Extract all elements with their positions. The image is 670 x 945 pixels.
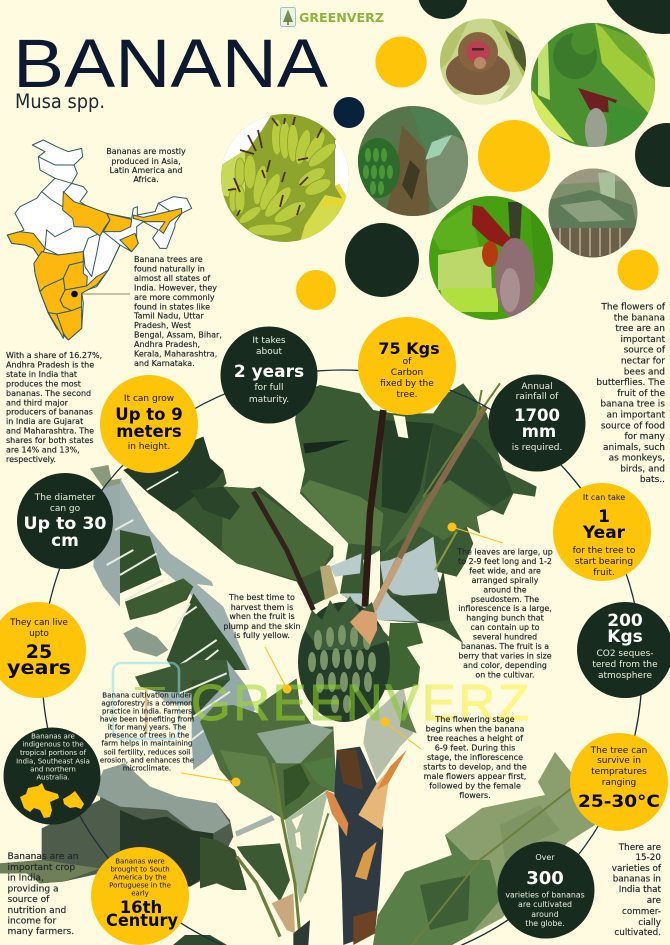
circle: height: It can grow — [124, 394, 174, 404]
circle: rainfall: is required. — [512, 443, 562, 453]
circle: bearing fruit — [553, 483, 651, 581]
text: flowers: bats.. — [640, 475, 665, 485]
text: share of production — [6, 351, 102, 464]
icon: Asia and Australia map — [20, 783, 84, 818]
photo circle: bunch on tree — [356, 106, 474, 216]
text: natural occurrence: found naturally in — [134, 264, 205, 274]
upper left dark leaf — [123, 437, 338, 610]
circle: bearing fruit: Year — [582, 523, 626, 543]
circle: carbon: tree. — [397, 390, 417, 400]
circle: varieties global — [498, 842, 594, 938]
text: commercial varieties: bananas in — [613, 874, 661, 884]
text: production regions — [106, 147, 186, 184]
text: harvest time: when the fruit is — [229, 612, 295, 621]
text: share of production: respectively. — [6, 455, 56, 464]
upper fragment of left leaf — [135, 660, 255, 770]
watermark — [113, 663, 529, 739]
pointer: flowering — [380, 718, 421, 749]
text: important crop: Bananas are an — [8, 852, 79, 862]
text: leaves and inflorescence: on the cultivar. — [475, 670, 535, 679]
text: agroforestry: erosion, and enhances the — [100, 756, 194, 764]
text: commercial varieties: There are — [618, 843, 661, 853]
text: commercial varieties: 15-20 — [635, 853, 661, 863]
circle: indigenous range: Bananas are — [31, 732, 75, 740]
circle: indigenous range — [4, 728, 100, 824]
circle: indigenous range: India, Southeast Asia — [16, 758, 90, 766]
text: agroforestry: soil fertility, reduces soil — [104, 748, 190, 756]
text: natural occurrence: India. However, they — [134, 283, 217, 292]
text: flowers — [596, 302, 666, 485]
circle: sequestration: 200 — [607, 611, 643, 631]
text: leaves and inflorescence: arranged spirally — [472, 576, 539, 585]
text: agroforestry: presence of trees in the — [105, 730, 189, 740]
circle: height: meters — [116, 422, 182, 441]
text: agroforestry: have been benefiting from — [100, 714, 194, 724]
text: agroforestry: microclimate. — [123, 764, 171, 772]
photo circle: monkey — [440, 18, 527, 106]
circle: sequestration: tered from the — [592, 660, 658, 670]
text: leaves and inflorescence: around the — [483, 585, 527, 594]
text: flowering stage: followed by the female — [429, 782, 521, 790]
bottom left grey leaf — [0, 763, 233, 887]
watermark: GREENVERZ — [191, 674, 529, 731]
circle: carbon — [358, 317, 456, 415]
circle: 16th century: Bananas were — [115, 858, 165, 866]
text: agroforestry: farm helps in maintaining — [101, 738, 193, 748]
text: flowers: the banana — [614, 313, 665, 323]
text: commercial varieties: cultivated. — [614, 928, 661, 938]
text: flowers: animals, such — [603, 443, 665, 453]
bottom right leaf — [373, 752, 595, 945]
text: natural occurrence: Andhra Pradesh, — [134, 340, 200, 349]
text: flowers: source of — [624, 346, 666, 356]
text: share of production: in India are Gujarat — [6, 417, 83, 426]
logo: GREENVERZ — [299, 11, 384, 25]
photo circle: banana flower — [429, 196, 553, 320]
circle: height: in height. — [128, 442, 170, 452]
circle: sequestration — [577, 602, 670, 698]
text: harvest time: is fully yellow. — [234, 631, 290, 640]
text: agroforestry: Banana cultivation under — [102, 690, 192, 700]
circle: bearing fruit: for the tree to — [573, 546, 636, 556]
text: important crop: providing a — [8, 884, 59, 894]
circle: indigenous range: indigenous to the — [22, 740, 84, 748]
brown rib centre — [373, 407, 485, 610]
photo circle: banana field — [548, 168, 638, 258]
text: agroforestry: practice in India. Farmers — [102, 706, 192, 716]
text: flowering stage: flowers. — [459, 791, 491, 800]
text: flowers: for many — [624, 432, 666, 442]
circle: height — [100, 375, 198, 473]
circle: sequestration: atmosphere — [598, 671, 652, 681]
circle: varieties global: varieties of bananas — [505, 890, 585, 900]
text: flowering stage: stage, the inflorescence — [427, 753, 523, 762]
text: share of production: Andhra Pradesh is the — [6, 360, 94, 370]
circle: carbon: of — [403, 357, 412, 367]
circle: lifespan — [0, 602, 86, 698]
text: leaves and inflorescence: berry that varies in size — [458, 652, 552, 660]
text: agroforestry: agroforestry is a common — [101, 698, 193, 708]
text: leaves and inflorescence: can contain up to — [471, 623, 540, 632]
circle: bearing fruit: fruit. — [593, 568, 615, 578]
text: commercial varieties — [612, 843, 662, 938]
text: flowering stage: tree reaches a height of — [427, 734, 523, 743]
text: production regions: produced in Asia, — [111, 157, 181, 166]
text: important crop: many farmers. — [8, 927, 74, 937]
text: leaves and inflorescence: feet wide, and are — [469, 566, 541, 575]
text: flowers: The flowers of — [600, 302, 666, 312]
circle: carbon: fixed by the — [380, 379, 434, 389]
circle: temperature: The tree can — [590, 746, 647, 756]
text: leaves and inflorescence: to 2-9 feet long and 1-2 — [458, 557, 552, 566]
top centre large leaf — [295, 383, 537, 643]
circle: diameter — [17, 473, 113, 569]
text: share of production: and third major — [6, 398, 69, 407]
text: natural occurrence: found in states like — [134, 302, 210, 311]
text: natural occurrence: are more commonly — [134, 293, 215, 302]
circle: maturity — [220, 326, 318, 424]
dark and yellow decorative circles — [296, 0, 670, 310]
text: production regions: Latin America and — [110, 166, 182, 175]
banana bunch — [298, 596, 392, 722]
circle: height: Up to 9 — [115, 405, 183, 424]
text: natural occurrence: Tamil Nadu, Uttar — [133, 312, 204, 321]
text: commercial varieties: are — [647, 896, 661, 906]
text: harvest time — [223, 593, 301, 640]
circle: rainfall: Annual — [521, 382, 553, 392]
text: share of production: shares for both states — [6, 436, 94, 445]
text: commercial varieties: commer- — [622, 907, 661, 917]
left pale leaf — [90, 465, 250, 670]
dark rib centre — [365, 383, 500, 610]
subtitle: Musa spp. — [15, 90, 105, 113]
circle: maturity: about — [256, 347, 282, 357]
text: flowering stage: 6-9 feet. During this — [435, 744, 515, 752]
circle: temperature: tempratures — [591, 767, 647, 777]
circle: lifespan: 25 — [26, 641, 52, 663]
right blob leaf beside bunch — [385, 623, 423, 690]
text: production regions: Bananas are mostly — [106, 147, 186, 156]
circle: bearing fruit: It can take — [583, 493, 625, 502]
text: share of production: produces the most — [6, 379, 81, 388]
text: flowers: butterflies. The — [596, 378, 665, 388]
text: share of production: are 14% and 13%, — [6, 446, 80, 454]
text: commercial varieties: cially — [638, 918, 661, 928]
text: flowers: nectar for — [621, 356, 665, 366]
circle: 16th century: 16th — [120, 898, 162, 917]
circle: diameter: The diameter — [34, 493, 95, 503]
pointer: leaves — [448, 522, 503, 543]
pointer: harvest — [265, 647, 292, 694]
text: harvest time: The best time to — [228, 593, 295, 602]
circle: rainfall: mm — [522, 422, 556, 441]
circle: lifespan: They can live — [9, 618, 68, 628]
circle: temperature: 25-30°C — [578, 792, 660, 812]
text: commercial varieties: varieties of — [612, 864, 662, 874]
text: flowers: an important — [606, 410, 665, 420]
text: natural occurrence: Pradesh, West — [134, 321, 191, 330]
circle: varieties global: 300 — [526, 868, 564, 889]
text: natural occurrence: Kerala, Maharashtra, — [134, 350, 217, 358]
circle: varieties global: around — [531, 910, 559, 919]
lower middle leaf — [200, 678, 337, 945]
circle: varieties global: the globe. — [525, 919, 565, 928]
circle: 16th century: early — [131, 890, 149, 898]
circle: 16th century — [91, 847, 189, 945]
text: leaves and inflorescence — [456, 548, 553, 679]
text: share of production: With a share of 16.27%, — [6, 351, 102, 360]
text: flowers: fruit of the — [617, 389, 665, 399]
text: natural occurrence: and Karnataka. — [134, 359, 195, 368]
circle: temperature: survive in — [597, 756, 641, 766]
circle: maturity: for full — [254, 383, 284, 393]
circle: maturity: 2 years — [234, 362, 304, 382]
stalk base orange — [350, 610, 377, 645]
circle: lifespan: years — [7, 657, 71, 679]
banana plant illustration — [0, 383, 595, 945]
text: leaves and inflorescence: inflorescence is a large, — [458, 604, 552, 613]
circle: sequestration: Kgs — [607, 627, 643, 647]
text: flowers: tree are an — [615, 324, 665, 334]
circle: diameter: Up to 30 — [24, 514, 107, 534]
text: harvest time: harvest them is — [231, 603, 293, 612]
circle: indigenous range: tropical portions of — [20, 749, 87, 757]
circle: bearing fruit: 1 — [598, 507, 610, 527]
circle: sequestration: CO2 seques- — [596, 649, 654, 659]
trunk — [325, 687, 417, 945]
logo — [280, 8, 384, 26]
text: flowering stage — [423, 715, 527, 800]
text: flowering stage: male flowers appear first, — [424, 772, 526, 781]
text: important crop: important crop — [8, 863, 75, 873]
text: share of production: state in India that — [6, 370, 77, 379]
text: important crop: nutrition and — [8, 906, 66, 916]
circle: 16th century: Portuguese in the — [109, 882, 171, 890]
connector ring — [42, 370, 642, 945]
title: BANANA — [13, 25, 328, 102]
text: flowers: as monkeys, — [609, 454, 665, 464]
text: natural occurrence — [133, 255, 222, 368]
text: leaves and inflorescence: several hundred — [473, 633, 537, 642]
text: flowers: banana tree is — [600, 400, 665, 410]
circle: indigenous range: and northern — [30, 766, 76, 774]
photo circle: bunch and flower in plant — [531, 23, 655, 152]
circle: rainfall — [488, 374, 586, 472]
circle: maturity: It takes — [252, 336, 286, 346]
text: leaves and inflorescence: and color, depending — [463, 661, 547, 670]
text: important crop: in India, — [8, 874, 44, 884]
circle: indigenous range: Australia. — [36, 774, 70, 782]
text: leaves and inflorescence: bananas. The fruit is a — [461, 642, 549, 651]
text: share of production: and Maharashtra. The — [6, 427, 94, 436]
circle: 16th century: America by the — [113, 874, 167, 882]
text: flowers: bees and — [624, 367, 665, 377]
India map — [7, 140, 192, 340]
map marker — [71, 291, 130, 297]
circle: rainfall: rainfall of — [516, 392, 559, 402]
circle: bearing fruit: start bearing — [575, 557, 633, 567]
text: natural occurrence: almost all states of — [134, 274, 210, 283]
circle: carbon: Carbon — [391, 368, 423, 378]
circle: temperature — [570, 733, 668, 831]
text: important crop — [8, 852, 79, 937]
text: natural occurrence: Bengal, Assam, Bihar, — [134, 331, 222, 340]
text: commercial varieties: India that — [619, 885, 662, 895]
circle: 16th century: brought to South — [110, 866, 170, 874]
text: leaves and inflorescence: hanging bunch that — [466, 614, 544, 623]
text: flowering stage: The flowering stage — [434, 715, 515, 724]
text: flowering stage: begins when the banana — [426, 724, 525, 734]
text: share of production: bananas. The second — [6, 389, 91, 398]
circle: temperature: ranging — [602, 778, 636, 788]
circle: diameter: can go — [50, 504, 81, 514]
text: agroforestry — [100, 690, 194, 772]
circle: varieties global: Over — [535, 853, 555, 862]
circle: 16th century: Century — [106, 911, 178, 930]
rib highlight — [423, 383, 500, 497]
small dark leaf at bottom — [173, 935, 227, 945]
text: flowering stage: starts to develop, and the — [423, 762, 527, 772]
text: agroforestry: it for many years. The — [108, 722, 186, 732]
text: flowers: important — [621, 335, 665, 345]
circle: varieties global: are cultivated — [518, 900, 572, 909]
text: natural occurrence: Banana trees are — [134, 255, 203, 264]
circle: rainfall: 1700 — [514, 406, 560, 425]
text: share of production: producers of bananas — [6, 408, 93, 417]
text: flowers: birds, and — [620, 464, 665, 474]
text: flowers: source of food — [601, 421, 665, 431]
text: leaves and inflorescence: pseudostem. The — [471, 595, 539, 604]
pointer: agroforestry — [181, 773, 240, 786]
text: harvest time: plump and the skin — [223, 622, 301, 631]
text: leaves and inflorescence: The leaves are large, up — [456, 548, 553, 556]
photo circle: banana bunch close-up — [221, 114, 349, 242]
text: production regions: Africa. — [133, 175, 159, 184]
circle: maturity: maturity. — [249, 395, 289, 405]
circle: lifespan: upto — [29, 629, 49, 639]
text: important crop: source of — [8, 895, 50, 905]
text: important crop: income for — [8, 916, 56, 926]
circle: carbon: 75 Kgs — [378, 339, 440, 358]
circle: diameter: cm — [51, 531, 79, 551]
